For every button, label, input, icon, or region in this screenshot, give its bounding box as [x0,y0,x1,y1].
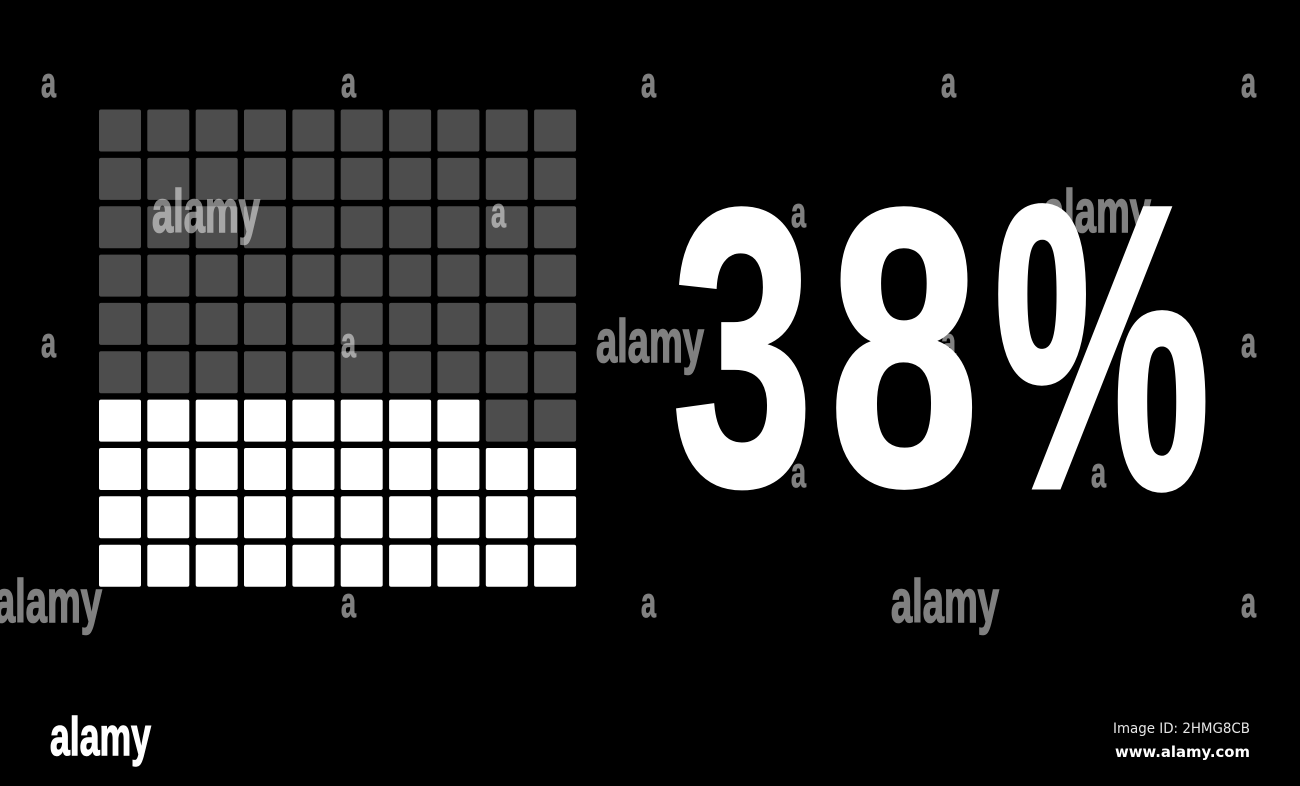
watermark: small letters [41,59,1257,627]
watermark: small letters: a [1241,59,1257,107]
watermark: large wordmarks: alamy [891,568,999,635]
watermark: small letters: a [641,59,657,107]
unfilled squares: 62 grey [99,110,576,442]
watermark: small letters: a [41,59,57,107]
watermark: small letters: a [791,189,807,237]
watermark: small letters: a [641,579,657,627]
watermark: small letters: a [1241,579,1257,627]
watermark: small letters: a [341,59,357,107]
waffle chart: 38 of 100 squares filled [99,110,576,587]
watermark: small letters: a [941,59,957,107]
big percentage value: 38%: 3 [672,127,813,568]
watermark: small letters: a [41,319,57,367]
watermark: large wordmarks: alamy [1043,178,1151,245]
watermark: small letters: a [791,449,807,497]
watermark: small letters: a [1241,319,1257,367]
website url: www.alamy.com [1115,743,1250,761]
watermark: small letters: a [1091,449,1107,497]
big percentage value: 38%: % [994,123,1210,572]
watermark: small letters: a [341,319,357,367]
watermark: large wordmarks: alamy [152,178,260,245]
image id: Image ID: 2HMG8CB [1113,721,1250,737]
logo: alamy: alamy [50,707,151,767]
watermark: large wordmarks [0,178,1151,635]
watermark: small letters: a [341,579,357,627]
big percentage value: 38%: 8 [829,127,979,568]
watermark: large wordmarks: alamy [596,308,704,375]
watermark: small letters: a [491,189,507,237]
watermark: small letters: a [941,319,957,367]
filled squares: 38 white [99,400,576,587]
big percentage value: 38% [672,123,1210,572]
watermarks [0,59,1257,635]
